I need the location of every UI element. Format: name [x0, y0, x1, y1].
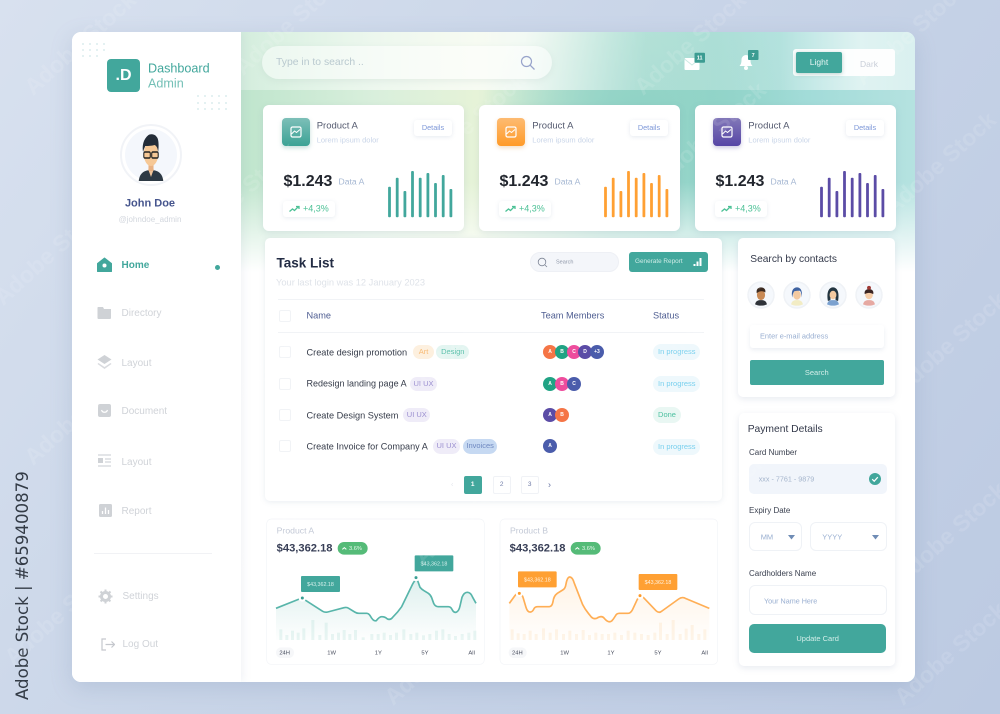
- icon: bell with badge: [740, 50, 758, 70]
- profile avatar: [120, 124, 182, 186]
- pagination: 1: [471, 481, 474, 488]
- brand title: Dashboard: [148, 62, 210, 76]
- theme toggle: Light: [810, 57, 828, 67]
- month select: [749, 522, 802, 551]
- panel: product card teal: Lorem ipsum dolor: [317, 135, 379, 144]
- dashboard window: [72, 32, 915, 682]
- charts: product A and product B: [266, 518, 718, 664]
- chart card: product A: 24H: [279, 651, 290, 657]
- logo: [107, 59, 140, 92]
- panel: product card teal: $1.243: [284, 172, 332, 190]
- panel: product card purple: Data A: [770, 176, 796, 186]
- logo: .D: [116, 67, 132, 84]
- profile name: John Doe: [125, 198, 175, 210]
- chart card: product B: 5Y: [654, 651, 662, 657]
- header search bar: Type in to search ..: [276, 56, 364, 67]
- profile name: @johndoe_admin: [119, 214, 181, 224]
- vertical stock credit: Adobe Stock | #659400879: [13, 471, 32, 700]
- row: create design system: [279, 407, 681, 423]
- panel: product card orange: Details: [638, 123, 660, 132]
- nav: document: Document: [122, 406, 167, 417]
- row: create design promotion: [279, 344, 700, 360]
- nav: settings: [98, 590, 159, 604]
- row: create design promotion: Design: [441, 347, 464, 356]
- nav: home: [97, 258, 220, 272]
- chart card: product A: All: [468, 651, 475, 657]
- icon: teal chart: [280, 118, 312, 150]
- row: create invoice: UI UX: [436, 441, 456, 450]
- task list heading: Task List: [276, 255, 334, 270]
- email input: [750, 325, 884, 348]
- table header: Status: [653, 310, 679, 320]
- watermark: Adobe Stock: [649, 266, 771, 380]
- header search bar: [262, 46, 552, 79]
- panel: product card orange: Lorem ipsum dolor: [532, 135, 594, 144]
- row: create invoice: Invoices: [466, 441, 494, 450]
- row: redesign landing page: A: [548, 380, 552, 386]
- panel: payment details: Cardholders Name: [749, 569, 816, 578]
- update button: [749, 624, 886, 653]
- panel: payment details: Expiry Date: [749, 506, 790, 514]
- row: create design promotion: Create design promotion: [306, 347, 407, 357]
- bar chart: [820, 171, 884, 218]
- watermark: Adobe Stock: [189, 326, 311, 440]
- panel: product card purple: [695, 105, 896, 231]
- pagination: 3: [528, 481, 532, 488]
- panel: product card orange: Data A: [554, 176, 580, 186]
- panel: product card purple: +4,3%: [735, 203, 761, 213]
- pagination: ‹: [451, 482, 453, 488]
- pagination: [451, 476, 551, 494]
- row: create design promotion: Art: [419, 347, 428, 356]
- chart card: product A: Product A: [277, 525, 314, 535]
- bar chart: [604, 171, 668, 218]
- row: create design system: Create Design System: [306, 410, 398, 420]
- nav: layout: [98, 355, 152, 369]
- chart card: product A: 1Y: [375, 651, 382, 657]
- icon: mail with badge: [684, 52, 705, 70]
- panel: product card orange: Product A: [532, 120, 574, 131]
- row: create design system: Done: [658, 410, 676, 419]
- brand title: [148, 62, 210, 91]
- watermark: Adobe Stock: [179, 136, 301, 250]
- icon: mail with badge: 11: [697, 56, 703, 62]
- year select: YYYY: [822, 533, 842, 542]
- watermark: Adobe Stock: [189, 496, 311, 610]
- table header: [279, 310, 679, 322]
- pagination: 2: [500, 481, 504, 488]
- task search: Search: [556, 259, 573, 265]
- row: redesign landing page: C: [572, 380, 576, 386]
- row: create invoice: Create Invoice for Company A: [306, 441, 428, 451]
- update button: Update Card: [796, 634, 839, 643]
- row: create invoice: [279, 439, 700, 455]
- panel: product card teal: [263, 105, 464, 231]
- bar chart: [388, 171, 452, 218]
- row: redesign landing page: Redesign landing page A: [306, 378, 407, 388]
- icon: bell with badge: 7: [752, 53, 755, 59]
- nav: report: [99, 504, 152, 517]
- chart card: product B: 3.6%: [582, 546, 595, 552]
- brand title: Admin: [148, 77, 184, 91]
- row: create design promotion: C: [572, 349, 576, 355]
- nav: home: Home: [122, 260, 149, 271]
- panel: search by contacts: [738, 238, 894, 397]
- chart card: product B: $43,362.18: [645, 580, 671, 586]
- panel: task list: [265, 238, 722, 501]
- name input: Your Name Here: [764, 596, 817, 605]
- generate report button: [628, 252, 708, 272]
- chart card: product A: $43,362.18: [277, 543, 333, 555]
- panel: product card purple: $1.243: [716, 172, 764, 190]
- search button: [750, 360, 884, 384]
- watermark: Adobe Stock: [379, 596, 501, 710]
- chart card: product B: $43,362.18: [524, 577, 551, 583]
- month select: MM: [761, 533, 773, 542]
- panel: product card teal: +4,3%: [303, 203, 329, 213]
- pagination: ›: [548, 479, 551, 489]
- panel: product card purple: Lorem ipsum dolor: [748, 135, 810, 144]
- watermark: Adobe Stock: [0, 556, 121, 670]
- panel: product card orange: +4,3%: [519, 203, 545, 213]
- email input: Enter e-mail address: [760, 331, 828, 340]
- watermark: Adobe Stock: [649, 446, 771, 560]
- chart card: product A: 3.6%: [349, 546, 362, 552]
- panel: payment details: Payment Details: [748, 423, 823, 434]
- nav: report: Report: [122, 506, 152, 517]
- panel: product card orange: [479, 105, 680, 231]
- row: redesign landing page: [279, 376, 700, 392]
- name input: [749, 585, 887, 615]
- table header: Name: [306, 310, 331, 320]
- decorative dots top left: [82, 43, 105, 57]
- row: create design promotion: B: [560, 349, 564, 355]
- row: redesign landing page: B: [560, 380, 564, 386]
- panel: product card purple: Product A: [748, 120, 790, 131]
- chart card: product B: $43,362.18: [510, 543, 566, 555]
- nav: directory: [98, 307, 162, 319]
- chart card: product A: 1W: [327, 651, 337, 657]
- panel: product card teal: Details: [422, 123, 444, 132]
- chart card: product B: 1Y: [607, 651, 615, 657]
- chart card: product B: Product B: [510, 525, 548, 535]
- watermark: Adobe Stock: [409, 456, 531, 570]
- row: create invoice: In progress: [658, 442, 696, 451]
- theme toggle: Dark: [860, 58, 878, 68]
- theme toggle: [793, 49, 895, 76]
- watermark: Adobe Stock: [409, 66, 531, 180]
- icon: orange chart: [495, 118, 527, 150]
- watermark: Adobe Stock: [879, 106, 1000, 220]
- row: create design promotion: In progress: [658, 347, 696, 356]
- generate report button: Generate Report: [635, 258, 683, 265]
- chart card: product A: $43,362.18: [421, 561, 447, 567]
- row: create design system: UI UX: [407, 410, 427, 419]
- panel: product card orange: $1.243: [500, 172, 548, 190]
- row: create design promotion: D: [583, 349, 587, 355]
- nav: directory: Directory: [122, 308, 162, 319]
- header band: [241, 32, 915, 90]
- search button: Search: [805, 368, 829, 376]
- table header: Team Members: [541, 310, 604, 320]
- panel: product card teal: Product A: [317, 120, 358, 131]
- panel: payment details: Card Number: [749, 448, 797, 456]
- watermark: Adobe Stock: [399, 286, 521, 400]
- panel: product card purple: Details: [854, 123, 876, 132]
- card number field: [749, 464, 887, 494]
- row: create design system: A: [548, 412, 552, 418]
- row: create design promotion: +3: [594, 349, 600, 355]
- chart card: product B: 1W: [560, 651, 570, 657]
- row: create invoice: A: [548, 443, 552, 449]
- panel: payment details: [739, 413, 895, 666]
- panel: product card teal: Data A: [338, 176, 364, 186]
- year select: [810, 522, 887, 551]
- nav: document: [98, 404, 167, 417]
- nav: log out: Log Out: [122, 639, 158, 650]
- sidebar background: [72, 32, 241, 682]
- chart card: product B: All: [701, 651, 708, 657]
- panel: task list: Your last login was 12 January 2023: [276, 277, 425, 287]
- content background gradient: [241, 32, 915, 682]
- nav: log out: [101, 638, 158, 651]
- panel: search by contacts: Search by contacts: [750, 253, 837, 264]
- chart card: product B: 24H: [512, 651, 523, 657]
- profile name: [119, 198, 181, 224]
- card number field: xxx - 7761 - 9879: [759, 475, 814, 484]
- chart card: product B: [500, 519, 718, 664]
- chart card: product A: $43,362.18: [307, 582, 334, 588]
- icon: purple chart: [711, 118, 743, 150]
- task search: [530, 252, 619, 272]
- nav: layout list: [98, 454, 152, 468]
- row: create design promotion: A: [548, 349, 552, 355]
- row: redesign landing page: In progress: [658, 379, 696, 388]
- watermark: Adobe Stock: [19, 356, 141, 470]
- chart card: product A: [267, 519, 484, 664]
- watermark: Adobe Stock: [649, 76, 771, 190]
- contact avatars: [748, 282, 882, 308]
- row: redesign landing page: UI UX: [413, 378, 434, 388]
- chart card: product A: 5Y: [421, 651, 429, 657]
- nav: layout list: Layout: [122, 456, 152, 468]
- nav: layout: Layout: [122, 358, 152, 368]
- nav: settings: Settings: [122, 591, 159, 602]
- row: create design system: B: [560, 412, 564, 418]
